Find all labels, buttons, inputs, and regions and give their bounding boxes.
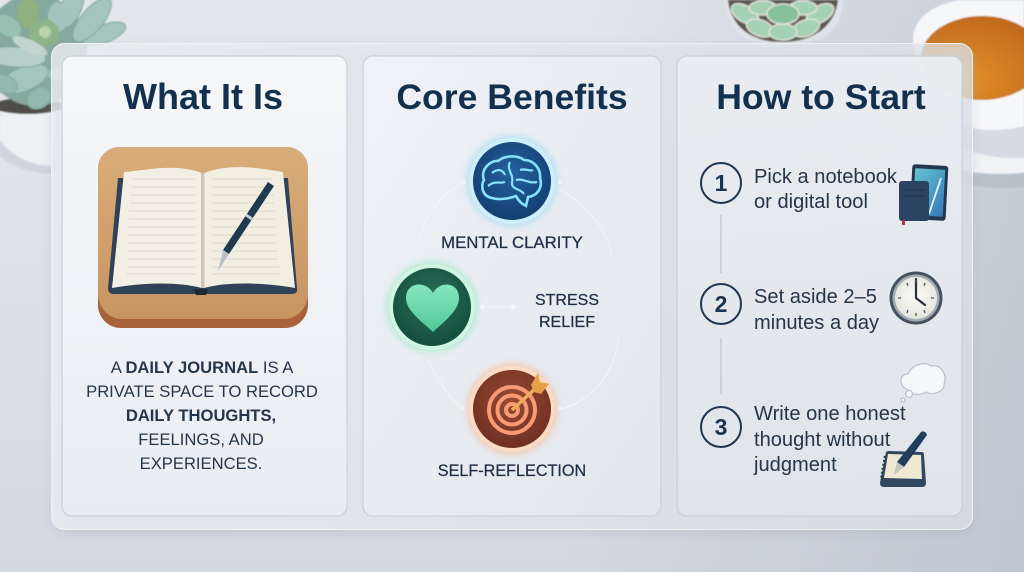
icon: notepad with pen [880,431,927,487]
decoration: top succulent in pot [724,0,843,46]
heading: what it is: What It Is [123,76,283,117]
icon: pen [218,182,274,271]
text: description: DAILY THOUGHTS, [126,406,276,425]
text: description [86,358,318,473]
decoration: tea cup and saucer [882,0,1024,188]
heading: core benefits: Core Benefits [396,77,628,117]
step 3 text [753,403,906,476]
illustration: open journal with pen on wood board [98,147,308,328]
icon: clock [890,272,942,324]
icon: target with arrow [467,364,557,454]
step number 3: 3 [715,414,727,440]
text: description: A DAILY JOURNAL IS A [111,358,294,377]
step 2 [701,272,942,334]
decoration: left succulent in pot [0,0,129,174]
label: stress relief: RELIEF [539,314,595,331]
heading: how to start: How to Start [716,77,926,117]
step 3 text: thought without [754,429,891,451]
step 3 text: judgment [753,454,837,476]
text: description: PRIVATE SPACE TO RECORD [86,382,318,401]
label: mental clarity: MENTAL CLARITY [441,233,583,252]
step number 2 [701,284,741,324]
step 1 text: Pick a notebook [754,166,898,188]
icon: brain [467,136,557,226]
text: description: EXPERIENCES. [140,454,262,473]
step 1 text [754,166,898,213]
step 1 [701,163,948,225]
step 2 text: minutes a day [754,312,879,334]
step 1 text: or digital tool [754,191,868,213]
step 2 text: Set aside 2–5 [754,286,877,308]
outer glass panel [52,44,972,530]
label: self-reflection: SELF-REFLECTION [438,462,586,480]
label: stress relief: STRESS [535,292,599,309]
soft shadow under glass panel [51,46,973,534]
connector ring [418,180,619,410]
step number 3 [701,407,741,447]
icon: notebook and tablet [899,164,948,225]
panel: what it is [62,56,347,516]
panel: how to start [677,56,962,516]
step number 2: 2 [715,291,727,317]
label: stress relief [535,292,599,331]
step number 1 [701,163,741,203]
icon: thought cloud [901,364,945,402]
step connectors [720,215,722,394]
step 2 text [754,286,879,334]
step 3 [701,364,945,487]
panel: core benefits [363,56,661,516]
text: description: FEELINGS, AND [138,430,264,449]
step 3 text: Write one honest [754,403,906,425]
step number 1: 1 [715,170,728,196]
icon: heart [387,262,477,352]
